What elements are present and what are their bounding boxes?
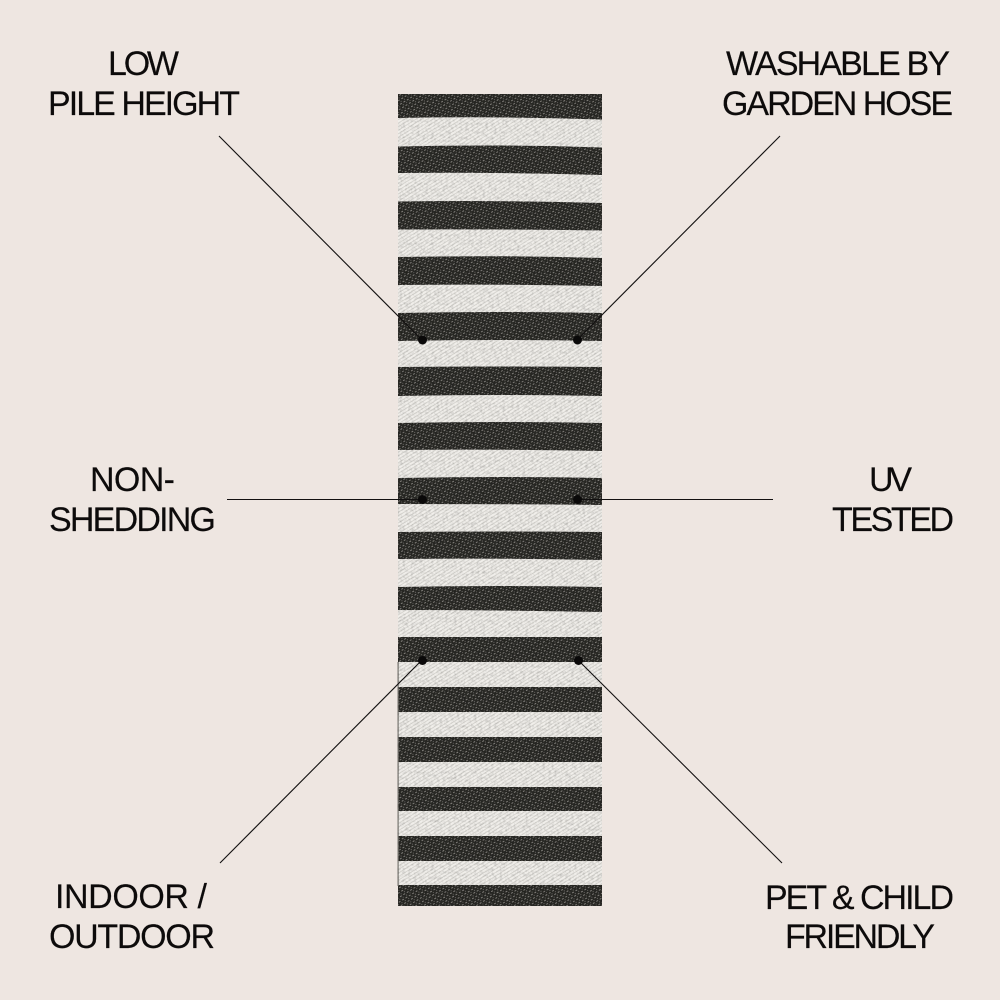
heading: low pile height: PILE HEIGHT xyxy=(48,85,240,123)
heading: uv tested: UV xyxy=(869,461,912,499)
heading: indoor / outdoor: OUTDOOR xyxy=(49,918,215,956)
heading: washable by garden hose xyxy=(722,45,953,123)
heading: indoor / outdoor xyxy=(49,878,215,956)
striped runner rug xyxy=(398,94,602,906)
rug dark stripes xyxy=(398,94,602,906)
heading: uv tested xyxy=(832,461,954,539)
heading: low pile height xyxy=(48,45,240,123)
heading: pet and child friendly xyxy=(765,879,954,956)
leader line and dot xyxy=(219,136,427,344)
rug left edge shadow xyxy=(398,662,399,886)
leader line and dot xyxy=(227,495,427,504)
heading: non-shedding: NON- xyxy=(90,461,175,499)
callout: washable by garden hose xyxy=(573,45,953,344)
callout: non-shedding xyxy=(49,461,427,539)
callout: uv tested xyxy=(573,461,954,539)
heading: uv tested: TESTED xyxy=(832,501,954,539)
heading: washable by garden hose: WASHABLE BY xyxy=(726,45,950,83)
heading: non-shedding xyxy=(49,461,216,539)
heading: non-shedding: SHEDDING xyxy=(49,501,216,539)
callout: low pile height xyxy=(48,45,427,344)
heading: low pile height: LOW xyxy=(108,45,179,83)
leader line and dot xyxy=(573,495,773,504)
leader line and dot xyxy=(573,136,780,344)
heading: pet and child friendly: FRIENDLY xyxy=(785,918,935,956)
callout: pet and child friendly xyxy=(574,656,954,956)
rug light base xyxy=(398,94,602,906)
heading: washable by garden hose: GARDEN HOSE xyxy=(722,85,953,123)
heading: pet and child friendly: PET & CHILD xyxy=(765,879,954,917)
leader line and dot xyxy=(220,656,427,863)
leader line and dot xyxy=(574,656,782,863)
callout: indoor / outdoor xyxy=(49,656,427,956)
heading: indoor / outdoor: INDOOR / xyxy=(55,878,208,916)
